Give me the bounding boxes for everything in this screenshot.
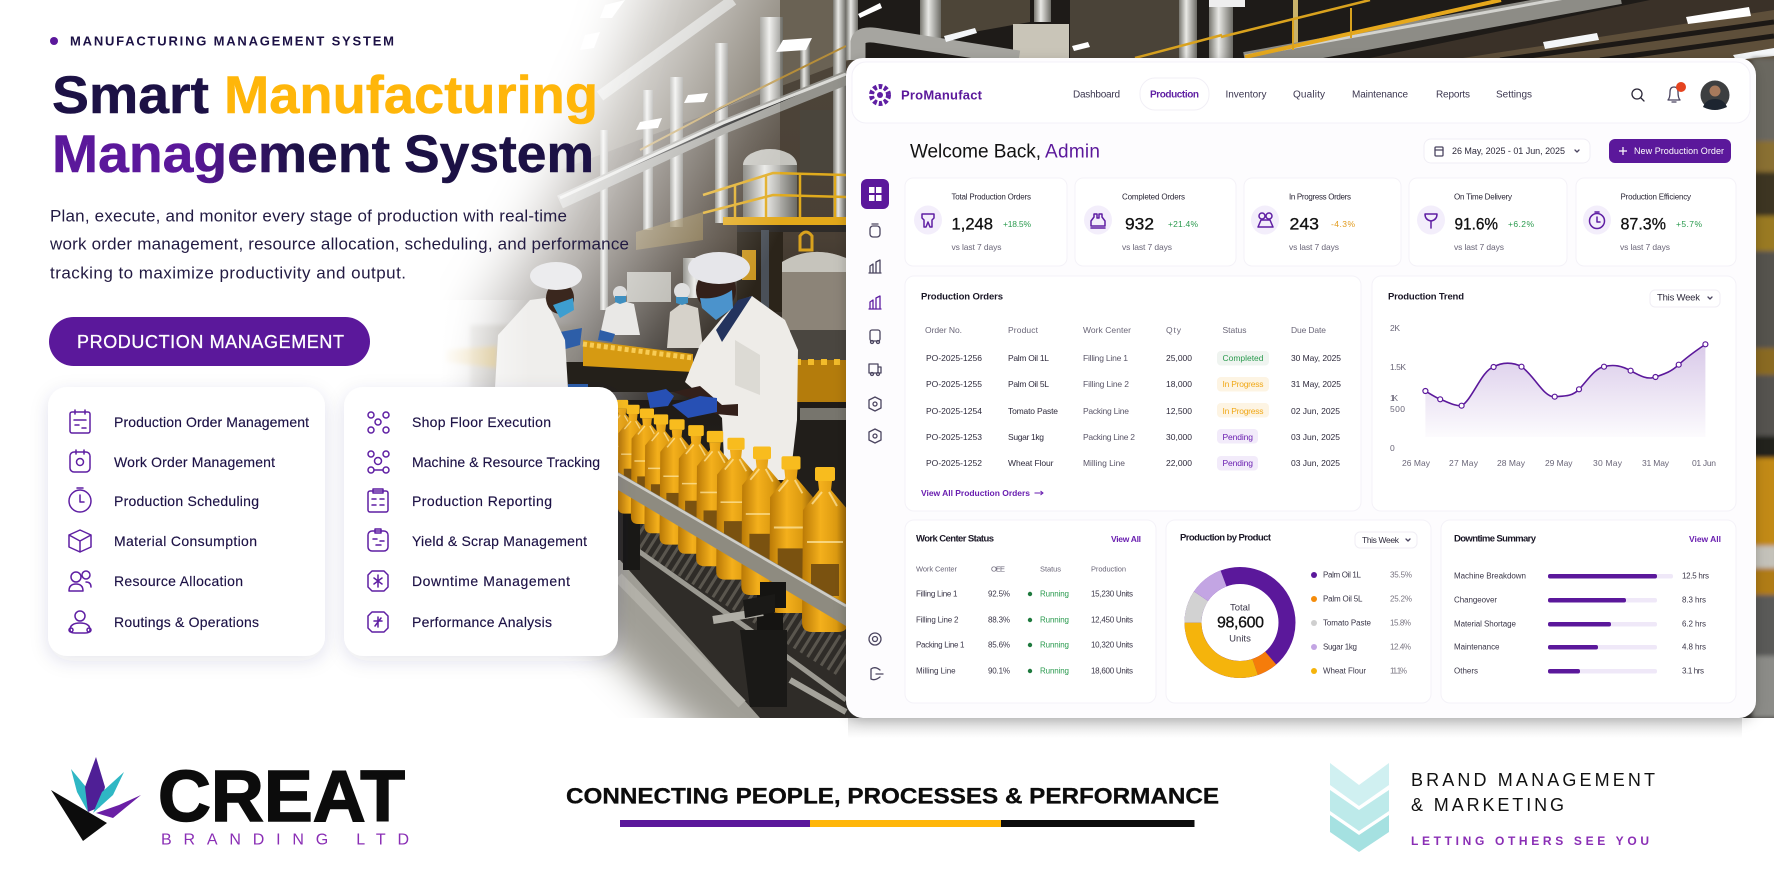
panel: features left bbox=[48, 387, 325, 656]
row PO-2025-1256 bbox=[926, 351, 1341, 366]
back line bottles bbox=[566, 340, 846, 420]
production by product donut: Production by Product bbox=[1180, 532, 1272, 544]
main title: Management bbox=[52, 125, 390, 184]
KPI: in progress orders: 243 bbox=[1290, 214, 1319, 234]
KPI: production efficiency: Production Efficiency bbox=[1620, 192, 1691, 202]
intro paragraph bbox=[49, 206, 629, 282]
KPI: total production orders: +18.5% bbox=[1003, 219, 1031, 229]
intro paragraph: Plan, execute, and monitor every stage of production with real-time bbox=[50, 206, 567, 226]
work center status table: Work Center Status bbox=[916, 534, 994, 544]
navigation links: Quality bbox=[1293, 90, 1325, 100]
feature: Routings & Operations bbox=[69, 611, 259, 633]
row PO-2025-1252: 22,000 bbox=[1166, 458, 1192, 468]
donut center total: Units bbox=[1229, 634, 1251, 644]
KPI: completed orders: +21.4% bbox=[1168, 219, 1198, 229]
footer: brand management logo: & MARKETING bbox=[1411, 795, 1564, 815]
main title: Smart bbox=[52, 66, 209, 125]
link: view all production orders: View All Production Orders bbox=[921, 488, 1030, 498]
table header: Due Date bbox=[1291, 325, 1326, 335]
row PO-2025-1252 bbox=[926, 456, 1340, 470]
KPI: in progress orders bbox=[1244, 178, 1401, 266]
feature: Shop Floor Execution bbox=[368, 412, 551, 433]
row PO-2025-1252: Pending bbox=[1222, 458, 1253, 468]
dashboard panel bbox=[846, 58, 1756, 718]
row PO-2025-1254: 02 Jun, 2025 bbox=[1291, 406, 1340, 416]
row PO-2025-1253: Packing Line 2 bbox=[1083, 432, 1135, 442]
row filling line 2: Running bbox=[1040, 616, 1069, 624]
table header: Production bbox=[1091, 564, 1126, 574]
row PO-2025-1253: Sugar 1kg bbox=[1008, 432, 1044, 442]
feature: Production Reporting: Production Reporting bbox=[412, 493, 552, 509]
table header bbox=[916, 564, 1126, 574]
feature: Material Consumption: Material Consumption bbox=[114, 533, 257, 549]
donut legend: Sugar 1kg bbox=[1323, 642, 1357, 652]
top strip factory ceiling bbox=[846, 0, 1774, 62]
row changeover: 8.3 hrs bbox=[1682, 596, 1706, 604]
feature: Production Scheduling: Production Scheduling bbox=[114, 493, 259, 509]
brand logo bbox=[872, 86, 983, 104]
donut legend: Wheat Flour bbox=[1323, 666, 1366, 676]
icon: notification bell bbox=[1668, 82, 1686, 102]
row PO-2025-1254: In Progress bbox=[1222, 406, 1264, 416]
x axis labels bbox=[1402, 458, 1716, 468]
logo mark bbox=[51, 757, 141, 841]
downtime summary bbox=[1441, 520, 1736, 703]
row PO-2025-1255: Palm Oil 5L bbox=[1008, 379, 1049, 389]
worker: left foreground bbox=[495, 262, 588, 388]
row changeover bbox=[1454, 596, 1706, 604]
table header: Status bbox=[1040, 564, 1061, 574]
KPI: in progress orders: vs last 7 days bbox=[1289, 242, 1339, 252]
donut legend bbox=[1311, 570, 1412, 676]
icon: dashboard active bbox=[861, 179, 889, 209]
row filling line 1: Running bbox=[1040, 590, 1069, 598]
conveyor side rail bbox=[618, 472, 846, 626]
production orders table: Production Orders bbox=[921, 292, 1003, 302]
front bottles row bbox=[608, 400, 848, 632]
feature: Production Order Management: Production Order Management bbox=[114, 414, 309, 430]
table header: OEE bbox=[991, 564, 1005, 574]
worker: main operator bbox=[647, 252, 798, 480]
row PO-2025-1253: PO-2025-1253 bbox=[926, 432, 982, 442]
feature: Work Order Management bbox=[70, 450, 275, 472]
navigation links: Reports bbox=[1436, 90, 1470, 100]
row packing line 1: Running bbox=[1040, 640, 1069, 650]
KPI: in progress orders: -4.3% bbox=[1331, 219, 1355, 229]
y axis labels: 2K bbox=[1390, 323, 1400, 333]
factory photo: production line with workers bbox=[448, 0, 1774, 718]
intro paragraph: tracking to maximize productivity and output. bbox=[50, 264, 406, 282]
row machine breakdown: 12.5 hrs bbox=[1682, 572, 1709, 580]
row PO-2025-1255: In Progress bbox=[1222, 379, 1264, 389]
KPI: on time delivery bbox=[1409, 178, 1567, 266]
feature: Yield & Scrap Management bbox=[368, 529, 587, 551]
donut legend: Palm Oil 5L bbox=[1323, 594, 1363, 604]
main title: Manufacturing bbox=[224, 66, 598, 125]
KPI: in progress orders: In Progress Orders bbox=[1289, 192, 1351, 202]
navigation links: Maintenance bbox=[1352, 90, 1408, 100]
navigation links: Settings bbox=[1496, 90, 1532, 100]
date range selector bbox=[1424, 139, 1590, 163]
feature: Yield & Scrap Management: Yield & Scrap Management bbox=[412, 533, 587, 549]
row PO-2025-1252: 03 Jun, 2025 bbox=[1291, 458, 1340, 468]
work center status table bbox=[905, 520, 1156, 703]
donut legend: 11.1% bbox=[1390, 666, 1407, 676]
table header: Work Center bbox=[916, 564, 958, 574]
production trend chart bbox=[1372, 276, 1736, 511]
feature: Production Order Management bbox=[70, 410, 309, 433]
row PO-2025-1254 bbox=[926, 403, 1340, 418]
x axis labels: 30 May bbox=[1593, 458, 1623, 468]
production management pill: PRODUCTION MANAGEMENT bbox=[77, 332, 344, 352]
dropdown: this week: This Week bbox=[1657, 292, 1700, 304]
row PO-2025-1255: 18,000 bbox=[1166, 379, 1192, 389]
donut legend: 25.2% bbox=[1390, 594, 1412, 604]
row milling line bbox=[916, 666, 1133, 676]
main title bbox=[52, 66, 598, 184]
production orders table bbox=[905, 276, 1361, 511]
row PO-2025-1254: 12,500 bbox=[1166, 406, 1192, 416]
y axis labels: 500 bbox=[1390, 404, 1405, 414]
x axis labels: 31 May bbox=[1642, 458, 1670, 468]
production trend chart: Production Trend bbox=[1388, 292, 1464, 302]
feature: Work Order Management: Work Order Management bbox=[114, 454, 275, 470]
KPI: production efficiency: 87.3% bbox=[1620, 214, 1666, 234]
feature: Performance Analysis: Performance Analysis bbox=[412, 614, 552, 630]
welcome heading bbox=[910, 142, 1100, 162]
row others bbox=[1454, 666, 1704, 676]
navigation links: Production bbox=[1150, 90, 1199, 100]
footer: brand management logo: LETTING OTHERS SEE YOU bbox=[1411, 834, 1649, 848]
row others: Others bbox=[1454, 666, 1478, 676]
KPI: on time delivery: On Time Delivery bbox=[1454, 192, 1512, 202]
area under trend bbox=[1425, 344, 1705, 437]
row PO-2025-1254: PO-2025-1254 bbox=[926, 406, 982, 416]
dropdown: this week: This Week bbox=[1362, 535, 1400, 545]
row PO-2025-1256: 30 May, 2025 bbox=[1291, 353, 1341, 363]
table header: Order No. bbox=[925, 325, 962, 335]
row PO-2025-1255: PO-2025-1255 bbox=[926, 379, 982, 389]
main title: System bbox=[404, 125, 594, 184]
row machine breakdown bbox=[1454, 572, 1709, 580]
table header: Qty bbox=[1166, 325, 1182, 335]
donut legend: 35.5% bbox=[1390, 570, 1412, 580]
feature: Resource Allocation bbox=[69, 571, 243, 591]
row packing line 1: Packing Line 1 bbox=[916, 640, 965, 650]
KPI: total production orders: 1,248 bbox=[952, 214, 993, 234]
row PO-2025-1256: 25,000 bbox=[1166, 353, 1192, 363]
x axis labels: 29 May bbox=[1545, 458, 1573, 468]
production by product donut bbox=[1166, 520, 1431, 703]
donut legend: Palm Oil 1L bbox=[1323, 570, 1362, 580]
row milling line: 18,600 Units bbox=[1091, 666, 1133, 676]
footer: CREAT Branding logo: BRANDING LTD bbox=[161, 832, 409, 848]
tricolor divider bbox=[620, 820, 1194, 827]
dropdown: this week bbox=[1355, 532, 1417, 548]
row PO-2025-1252: Wheat Flour bbox=[1008, 458, 1054, 468]
right edge of photo bbox=[1752, 58, 1774, 718]
row PO-2025-1255 bbox=[926, 377, 1341, 392]
row PO-2025-1252: PO-2025-1252 bbox=[926, 458, 982, 468]
trend points bbox=[1423, 342, 1708, 408]
table header: Work Center bbox=[1083, 325, 1131, 335]
avatar bbox=[1700, 80, 1730, 110]
row machine breakdown: Machine Breakdown bbox=[1454, 572, 1526, 580]
y axis labels: 1.5K bbox=[1390, 362, 1406, 372]
feature: Shop Floor Execution: Shop Floor Execution bbox=[412, 414, 551, 430]
row PO-2025-1254: Packing Line bbox=[1083, 406, 1129, 416]
donut chart bbox=[1193, 576, 1287, 670]
x axis labels: 26 May bbox=[1402, 458, 1431, 468]
feature: Machine & Resource Tracking: Machine & Resource Tracking bbox=[412, 454, 600, 470]
table header: Product bbox=[1008, 325, 1039, 335]
feature: Performance Analysis bbox=[368, 612, 552, 632]
row changeover: Changeover bbox=[1454, 596, 1497, 604]
row milling line: Running bbox=[1040, 666, 1069, 676]
feature: Material Consumption bbox=[69, 530, 257, 552]
navigation links: Inventory bbox=[1226, 90, 1266, 100]
icon: search bbox=[1632, 89, 1644, 101]
worker: background left bbox=[560, 286, 640, 350]
production management pill bbox=[49, 317, 370, 366]
downtime summary: View All bbox=[1689, 534, 1721, 544]
new production order button: New Production Order bbox=[1634, 146, 1724, 156]
row PO-2025-1255: Filling Line 2 bbox=[1083, 379, 1129, 389]
feature: Resource Allocation: Resource Allocation bbox=[114, 573, 243, 589]
table header: Status bbox=[1222, 325, 1246, 335]
row filling line 2: 12,450 Units bbox=[1091, 616, 1133, 624]
KPI: production efficiency: +5.7% bbox=[1676, 219, 1702, 229]
feature: Production Reporting bbox=[368, 489, 552, 512]
row filling line 1: 92.5% bbox=[988, 590, 1010, 598]
KPI: total production orders: vs last 7 days bbox=[952, 242, 1002, 252]
KPI: completed orders: 932 bbox=[1125, 214, 1154, 234]
row maintenance: 4.8 hrs bbox=[1682, 642, 1706, 652]
row milling line: 90.1% bbox=[988, 666, 1010, 676]
downtime summary: Downtime Summary bbox=[1454, 534, 1537, 544]
top navigation bar bbox=[852, 62, 1750, 123]
donut center total bbox=[1217, 602, 1264, 644]
row packing line 1: 85.6% bbox=[988, 640, 1010, 650]
navigation links bbox=[1073, 90, 1532, 100]
footer: CREAT Branding logo bbox=[51, 757, 409, 848]
footer: brand management logo: BRAND MANAGEMENT bbox=[1411, 770, 1655, 790]
row filling line 1 bbox=[916, 590, 1133, 598]
worker: background right bbox=[667, 283, 703, 348]
navigation links: Dashboard bbox=[1073, 90, 1120, 100]
row PO-2025-1255: 31 May, 2025 bbox=[1291, 379, 1341, 389]
row PO-2025-1253: 30,000 bbox=[1166, 432, 1192, 442]
sidebar icons bbox=[861, 179, 889, 680]
conveyor line bbox=[582, 510, 848, 718]
row PO-2025-1256: Palm Oil 1L bbox=[1008, 353, 1049, 363]
y axis labels: 1K bbox=[1390, 393, 1398, 403]
KPI: on time delivery: 91.6% bbox=[1454, 214, 1498, 234]
row PO-2025-1253: 03 Jun, 2025 bbox=[1291, 432, 1340, 442]
feature: Downtime Management bbox=[368, 571, 570, 591]
chevrons mark bbox=[1330, 763, 1389, 852]
row material shortage bbox=[1454, 620, 1706, 628]
feature: Machine & Resource Tracking bbox=[368, 451, 600, 473]
date range selector: 26 May, 2025 - 01 Jun, 2025 bbox=[1452, 146, 1565, 156]
welcome heading: Welcome Back, bbox=[910, 142, 1041, 162]
row material shortage: Material Shortage bbox=[1454, 620, 1517, 628]
footer: tagline: CONNECTING PEOPLE, PROCESSES & PERFORMANCE bbox=[566, 784, 1219, 808]
row PO-2025-1256: PO-2025-1256 bbox=[926, 353, 982, 363]
row filling line 1: Filling Line 1 bbox=[916, 590, 958, 598]
x axis labels: 28 May bbox=[1497, 458, 1526, 468]
brand logo: ProManufact bbox=[901, 88, 983, 102]
dropdown: this week bbox=[1650, 290, 1720, 307]
KPI: on time delivery: vs last 7 days bbox=[1454, 242, 1504, 252]
row PO-2025-1256: Completed bbox=[1222, 353, 1264, 363]
table header bbox=[925, 325, 1326, 335]
row maintenance: Maintenance bbox=[1454, 642, 1500, 652]
trend line bbox=[1425, 344, 1705, 406]
y axis labels bbox=[1390, 323, 1406, 453]
footer: brand management logo bbox=[1330, 763, 1655, 852]
row packing line 1 bbox=[916, 640, 1133, 650]
donut legend: 12.4% bbox=[1390, 642, 1411, 652]
work center status table: View All bbox=[1111, 534, 1141, 544]
KPI: production efficiency bbox=[1576, 178, 1736, 266]
row maintenance bbox=[1454, 642, 1706, 652]
large steel tank bbox=[782, 252, 846, 332]
row filling line 2: 88.3% bbox=[988, 616, 1010, 624]
footer: CREAT Branding logo: CREAT bbox=[158, 757, 405, 837]
x axis labels: 01 Jun bbox=[1692, 458, 1716, 468]
row others: 3.1 hrs bbox=[1682, 666, 1704, 676]
row PO-2025-1252: Milling Line bbox=[1083, 458, 1125, 468]
welcome heading: Admin bbox=[1045, 142, 1100, 162]
eyebrow label: MANUFACTURING MANAGEMENT SYSTEM bbox=[70, 34, 394, 48]
y axis labels: 0 bbox=[1390, 443, 1395, 453]
row PO-2025-1254: Tomato Paste bbox=[1008, 406, 1058, 416]
row milling line: Milling Line bbox=[916, 666, 956, 676]
feature: Routings & Operations: Routings & Operations bbox=[114, 614, 259, 630]
row PO-2025-1253: Pending bbox=[1222, 432, 1253, 442]
KPI: total production orders bbox=[905, 178, 1067, 266]
feature: Production Scheduling bbox=[69, 488, 259, 512]
donut legend: 15.8% bbox=[1390, 618, 1411, 628]
new production order button bbox=[1609, 139, 1731, 163]
footer: tagline bbox=[566, 784, 1219, 827]
KPI: on time delivery: +6.2% bbox=[1508, 219, 1534, 229]
donut center total: 98,600 bbox=[1217, 614, 1264, 632]
feature: Downtime Management: Downtime Management bbox=[412, 573, 570, 589]
KPI: completed orders: vs last 7 days bbox=[1122, 242, 1172, 252]
shadow under dashboard bbox=[848, 718, 1742, 738]
haze over left of photo bbox=[440, 0, 780, 400]
row filling line 2 bbox=[916, 616, 1133, 624]
pale distant line on left bbox=[448, 324, 568, 387]
KPI: total production orders: Total Production Orders bbox=[952, 192, 1031, 202]
donut legend: Tomato Paste bbox=[1323, 618, 1372, 628]
KPI: completed orders bbox=[1075, 178, 1236, 266]
x axis labels: 27 May bbox=[1449, 458, 1479, 468]
intro paragraph: work order management, resource allocation, scheduling, and performance bbox=[49, 234, 629, 254]
row filling line 2: Filling Line 2 bbox=[916, 616, 959, 624]
row material shortage: 6.2 hrs bbox=[1682, 620, 1706, 628]
row PO-2025-1256: Filling Line 1 bbox=[1083, 353, 1128, 363]
KPI: completed orders: Completed Orders bbox=[1122, 192, 1185, 202]
panel: features right bbox=[344, 387, 618, 656]
row filling line 1: 15,230 Units bbox=[1091, 590, 1133, 598]
row PO-2025-1253 bbox=[926, 429, 1340, 444]
donut center total: Total bbox=[1230, 602, 1250, 614]
KPI: production efficiency: vs last 7 days bbox=[1620, 242, 1670, 252]
row packing line 1: 10,320 Units bbox=[1091, 640, 1133, 650]
